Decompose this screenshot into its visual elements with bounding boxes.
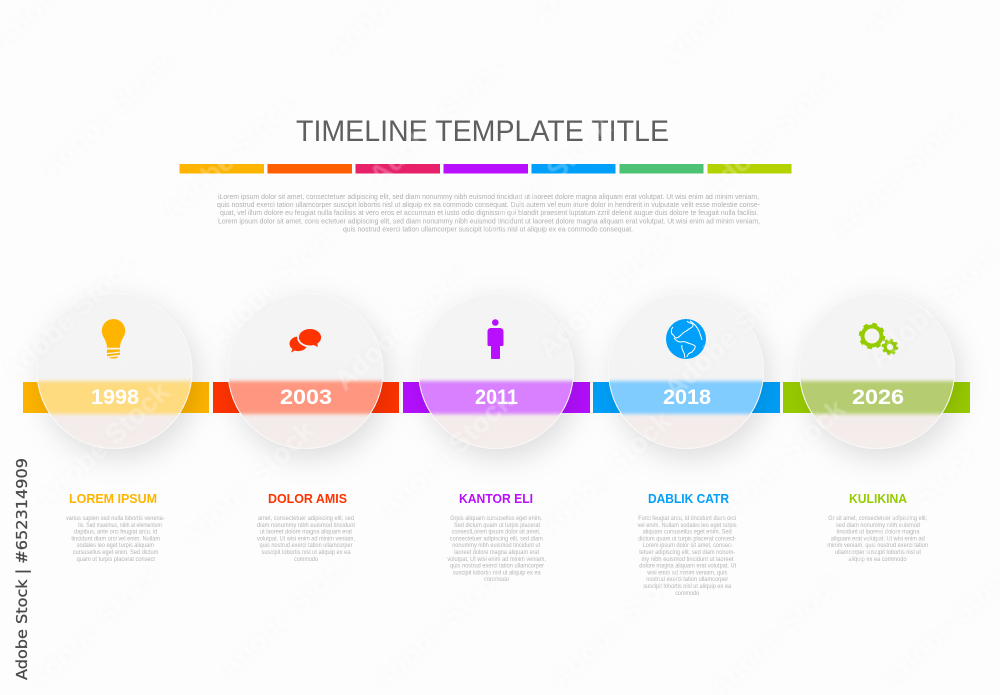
intro paragraph: quis nostrud exerci tation ullamcorper suscipit lobortis nisl ut aliquip ex ea commodo consequat. Duis autem vel eum iriure dolor in hendrerit in vulputate velit esse molestie conse- bbox=[217, 200, 760, 209]
column text: aliquam cursusellus eget enim. Sed bbox=[643, 530, 732, 536]
watermark pattern: Adobe Stock bbox=[531, 405, 678, 544]
column text: consectLorem ipsum dolor sit amet, bbox=[452, 530, 541, 536]
column text: sodales leo eget turpis aliquam bbox=[77, 543, 154, 549]
column text: tincidunt diam orci vel enim. Nullam bbox=[71, 536, 160, 542]
timeline bar segments bbox=[23, 382, 970, 413]
column heading: LOREM IPSUM bbox=[69, 491, 157, 506]
milestone 2011 bbox=[400, 294, 592, 448]
column text: varius sapien sed nulla lobortis venena- bbox=[66, 516, 165, 522]
watermark pattern: Adobe Stock bbox=[373, 385, 520, 524]
column text: volutpat. Ut wisi enim ad minim veniam, bbox=[257, 536, 355, 542]
intro paragraph: quis nostrud exerci tation ullamcorper suscipit lobortis nisl ut aliquip ex ea commodo consequat. bbox=[343, 225, 633, 234]
column text: cursusellus eget enim. Sed dictum bbox=[73, 550, 158, 556]
column text bbox=[447, 516, 546, 583]
column: Dolor Amis bbox=[257, 491, 355, 563]
column text: wisi enim ad minim veniam, quis bbox=[646, 570, 727, 576]
column heading: DABLIK CATR bbox=[648, 491, 730, 506]
column text: vel enim. Nullam sodales leo eget turpis bbox=[638, 523, 736, 529]
column text: sed diam nonummy nibh euismod bbox=[836, 523, 920, 529]
milestone 1998 bbox=[20, 294, 210, 448]
watermark pattern: Adobe Stock bbox=[532, 225, 679, 364]
watermark pattern: Adobe Stock bbox=[544, 555, 691, 694]
icon: person bbox=[488, 319, 504, 359]
column text: amet, consectetuer adipiscing elit, sed bbox=[258, 516, 354, 522]
watermark pattern: Adobe Stock bbox=[366, 558, 513, 695]
column text: Sed dictum quam ut turpis placerat bbox=[454, 523, 540, 529]
column text: aliquam erat volutpat. Ut wisi enim ad bbox=[831, 536, 925, 542]
column text: dapibus, ante orci feugiat arcu, id bbox=[74, 530, 157, 536]
column: Lorem Ipsum bbox=[66, 491, 165, 563]
watermark pattern: Adobe Stock bbox=[213, 545, 360, 684]
column text bbox=[638, 516, 736, 597]
column text: Lorem ipsum dolor sit amet, consec- bbox=[643, 543, 733, 549]
intro paragraph bbox=[217, 192, 760, 234]
column text: consectetuer adipiscing elit, sed diam bbox=[450, 536, 543, 542]
column text bbox=[257, 516, 355, 563]
column: Kantor Eli bbox=[447, 491, 546, 583]
stock id side label: Adobe Stock | #652314909 bbox=[13, 458, 31, 680]
column text: ullamcorper suscipit lobortis nisl ut bbox=[835, 550, 921, 556]
column text: tincidunt ut laoreet dolore magna bbox=[836, 530, 920, 536]
column text: commodo bbox=[675, 591, 700, 597]
intro paragraph: iLorem ipsum dolor sit amet, consectetuer adipiscing elit, sed diam nonummy nibh euismod tincidunt ut laoreet dolore magna aliquam erat volutpat. Ut wisi enim ad minim veniam, bbox=[218, 192, 759, 201]
year label 2026: 2026 bbox=[852, 386, 904, 409]
column text: suscipit lobortis nisl ut aliquip ex ea bbox=[453, 570, 541, 576]
colour stripe row under title bbox=[180, 164, 792, 174]
column heading: KULIKINA bbox=[849, 491, 908, 506]
column text: quis nostrud exerci tation ullamcorper bbox=[260, 543, 352, 549]
column text: aliquip ex ea commodo bbox=[848, 557, 907, 563]
milestone 2026 bbox=[780, 294, 974, 448]
title: TIMELINE TEMPLATE TITLE bbox=[296, 115, 669, 148]
icon: gears bbox=[860, 324, 897, 354]
column text: ut laoreet dolore magna aliquam erat bbox=[260, 530, 352, 536]
column heading: DOLOR AMIS bbox=[268, 491, 347, 506]
column text: dolore magna aliquam erat volutpat. Ut bbox=[639, 564, 736, 570]
column text: Forci feugiat arcu, id tincidunt diam orci bbox=[638, 516, 736, 522]
year label 1998: 1998 bbox=[91, 386, 139, 409]
watermark pattern: Adobe Stock bbox=[658, 265, 805, 404]
column text: nostrud exerci tation ullamcorper bbox=[646, 577, 728, 583]
watermark pattern: Adobe Stock bbox=[174, 415, 321, 554]
icon: globe bbox=[666, 319, 706, 359]
column text: laoreet dolore magna aliquam erat bbox=[454, 550, 540, 556]
intro paragraph: quat, vel illum dolore eu feugiat nulla facilisis at vero eros et accumsan et iusto odio dignissim qui blandit praesent luptatum zzril delenit augue duis dolore te feugait nulla facilisi. bbox=[220, 208, 758, 217]
watermark pattern: Adobe Stock bbox=[21, 558, 168, 695]
column text: suscipit lobortis nisl ut aliquip ex ea bbox=[643, 584, 732, 590]
column text bbox=[66, 516, 165, 563]
watermark pattern: Adobe Stock bbox=[155, 88, 302, 227]
year label 2003: 2003 bbox=[280, 386, 332, 409]
column text: tetuer adipiscing elit, sed diam nonum- bbox=[639, 550, 735, 556]
column text: commodo bbox=[294, 557, 319, 563]
watermark pattern: Adobe Stock bbox=[697, 65, 844, 204]
watermark pattern: Adobe Stock bbox=[0, 248, 143, 387]
watermark pattern: Adobe Stock bbox=[363, 52, 510, 191]
watermark pattern: Adobe Stock bbox=[328, 257, 475, 396]
column text: quam ut turpis placerat consect bbox=[77, 557, 155, 563]
column: Kulikina bbox=[827, 491, 928, 563]
year label 2018: 2018 bbox=[663, 386, 711, 409]
watermark pattern: Adobe Stock bbox=[825, 105, 972, 244]
column text: Grpis aliquam cursusellus eget enim. bbox=[450, 516, 542, 522]
year label 2011: 2011 bbox=[475, 386, 518, 409]
milestone 2018 bbox=[590, 294, 782, 448]
column text: volutpat. Ut wisi enim ad minim veniam, bbox=[447, 557, 546, 563]
watermark pattern: Adobe Stock bbox=[29, 376, 176, 515]
icon: light bulb bbox=[102, 319, 125, 358]
intro paragraph: Lorem ipsum dolor sit amet, cons ectetuer adipiscing elit, sed diam nonummy nibh euismod tincidunt ut laoreet dolore magna aliquam erat volutpat. Ut wisi enim ad minim veniam, bbox=[218, 216, 760, 225]
column: Dablik Catr bbox=[638, 491, 736, 597]
watermark pattern: Adobe Stock bbox=[34, 45, 181, 184]
column text: nonummy nibh euismod tincidunt ut bbox=[452, 543, 541, 549]
column text: commodo bbox=[484, 577, 510, 583]
column text: my nibh euismod tincidunt ut laoreet bbox=[642, 557, 734, 563]
column text: diam nonummy nibh euismod tincidunt bbox=[257, 523, 355, 529]
watermark pattern: Adobe Stock bbox=[471, 111, 618, 250]
column text bbox=[827, 516, 928, 563]
column text: dictum quam ut turpis placerat consect- bbox=[638, 536, 736, 542]
column text: tis. Sed maximus, nibh at elementum bbox=[78, 523, 162, 529]
column text: Gr sit amet, consectetuer adipiscing elit, bbox=[828, 516, 928, 522]
column text: minim veniam, quis nostrud exerci tation bbox=[827, 543, 928, 549]
milestone 2003 bbox=[210, 294, 402, 448]
watermark pattern: Adobe Stock bbox=[200, 215, 347, 354]
column heading: KANTOR ELI bbox=[459, 491, 533, 506]
column text: quis nostrud exerci tation ullamcorper bbox=[450, 564, 544, 570]
column text: suscipit lobortis nisl ut aliquip ex ea bbox=[262, 550, 351, 556]
icon: speech bubbles bbox=[290, 328, 322, 352]
watermark pattern: Adobe Stock bbox=[838, 438, 985, 577]
watermark pattern: Adobe Stock bbox=[705, 393, 852, 532]
